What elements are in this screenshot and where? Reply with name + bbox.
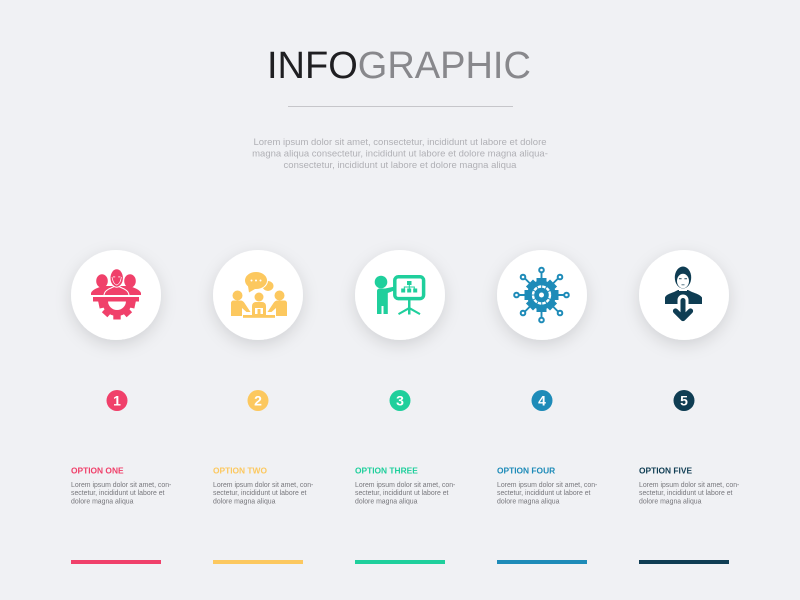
panel: option two [213,250,313,564]
number badge 2: 2 [254,392,262,408]
number badge 5: 5 [680,392,688,408]
option two text: Lorem ipsum dolor sit amet, con- [213,482,313,489]
option one text: OPTION ONE [71,466,124,476]
option four text: sectetur, incididunt ut labore et [497,490,591,497]
panel: option one [71,250,171,564]
option three text: sectetur, incididunt ut labore et [355,490,449,497]
option one text: sectetur, incididunt ut labore et [71,490,165,497]
option three text: dolore magna aliqua [355,498,418,506]
number badge 2 [248,390,268,411]
number badge 4: 4 [538,392,546,408]
option two text [213,466,313,506]
option five text: sectetur, incididunt ut labore et [639,490,733,497]
intro text block: consectetur, incididunt ut labore et dolore magna aliqua [284,160,517,171]
option four text: OPTION FOUR [497,466,555,476]
intro text block: magna aliqua consectetur, incididunt ut labore et dolore magna aliqua- [252,148,548,160]
number badge 5 [674,390,694,411]
option two text: dolore magna aliqua [213,498,276,506]
option one text: Lorem ipsum dolor sit amet, con- [71,482,171,489]
option two text: OPTION TWO [213,466,267,476]
icon: team on gear [91,268,141,320]
accent bar 3 [355,560,445,564]
icon: gear network [514,268,569,322]
option four text: dolore magna aliqua [497,498,560,506]
panel: option five [639,250,739,564]
number badge 4 [532,390,552,411]
option five text [639,466,739,506]
icon: meeting discussion [231,272,287,318]
number badge 3: 3 [396,392,404,408]
icon: person with down arrow [665,266,702,318]
option three text: Lorem ipsum dolor sit amet, con- [355,482,455,489]
panel: option four [497,250,597,564]
number badge 1 [106,390,128,411]
accent bar 2 [213,560,303,564]
option two text: sectetur, incididunt ut labore et [213,490,307,497]
option five text: OPTION FIVE [639,466,692,476]
intro text block [252,137,548,171]
option five text: dolore magna aliqua [639,498,702,506]
intro text block: Lorem ipsum dolor sit amet, consectetur, incididunt ut labore et dolore [253,137,547,148]
number badge 1: 1 [113,392,121,408]
option three text: OPTION THREE [355,466,418,476]
option one text [71,466,171,506]
accent bar 1 [71,560,161,564]
title: INFOGRAPHIC [267,45,531,87]
accent bar 5 [639,560,729,564]
option five text: Lorem ipsum dolor sit amet, con- [639,482,739,489]
accent bar 4 [497,560,587,564]
option one text: dolore magna aliqua [71,498,134,506]
option three text [355,466,455,506]
icon: presenter at board [375,276,424,315]
panel: option three [355,250,455,564]
number badge 3 [390,390,410,411]
option four text: Lorem ipsum dolor sit amet, con- [497,482,597,489]
option four text [497,466,597,506]
